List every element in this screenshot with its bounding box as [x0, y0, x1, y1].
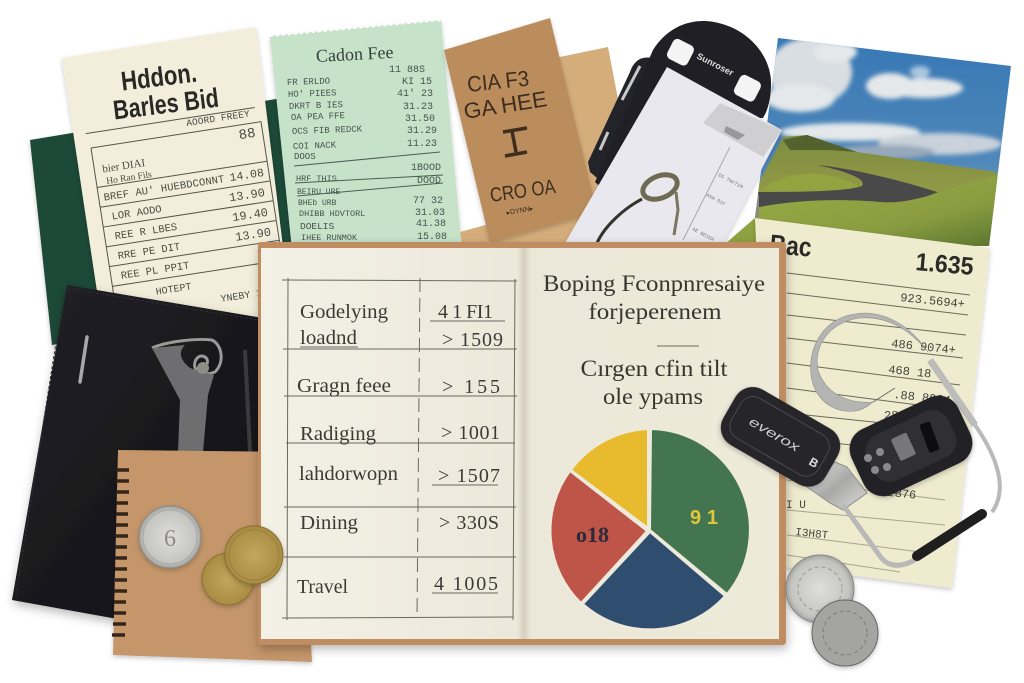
- strap connector: [807, 462, 867, 510]
- fee line items: COI NACK: [293, 140, 337, 152]
- foreground grass: [725, 175, 1000, 250]
- key fob left: B: [806, 454, 821, 471]
- winding road: [758, 165, 940, 208]
- handwritten notes: [462, 66, 558, 217]
- fee line items: BEIRU URE: [297, 188, 340, 197]
- expense table values: > 1509: [442, 329, 503, 351]
- ledger numbers: I U: [786, 500, 806, 512]
- silver coin upper: [786, 555, 854, 623]
- silver coin: [139, 506, 201, 568]
- fee line items: OA PEA FFE: [291, 111, 345, 123]
- fee line items: 41' 23: [397, 88, 433, 100]
- ledger numbers: I3H8T: [795, 527, 829, 542]
- fee line items: 1BOOD: [411, 163, 441, 174]
- wallet clasp: [152, 339, 221, 374]
- pie chart: 91: [690, 507, 718, 529]
- expense table labels: Gragn feee: [297, 375, 391, 397]
- receipt: cream bill: [62, 27, 292, 345]
- receipt table: RRE PE DIT: [117, 242, 181, 263]
- expense table labels: [297, 301, 398, 598]
- expense table labels: Travel: [297, 576, 348, 598]
- right ledger sheet: [755, 218, 990, 588]
- handwritten notes: ▸DYNN▸: [506, 205, 534, 217]
- black leather wallet: [12, 285, 275, 640]
- expense table values: > 330S: [439, 512, 499, 534]
- receipt table: Ho Ran Fils: [106, 170, 153, 187]
- fee line items: KI 15: [402, 77, 432, 88]
- metal ring: [811, 313, 928, 411]
- fee line items: DOOS: [294, 152, 316, 162]
- expense table labels: Godelying: [300, 301, 388, 323]
- right page heading: Cırgen cfin tilt: [580, 356, 728, 381]
- clipboard with paper: AE BDIDA: [691, 226, 715, 243]
- handwritten notes: GA HEE: [462, 86, 549, 124]
- fee line items: 31.23: [403, 102, 433, 113]
- clipboard with paper: [565, 21, 782, 243]
- ledger numbers: 923.5694+: [900, 291, 966, 312]
- green wallet behind receipts: [30, 98, 300, 345]
- fee line items: HRF THIS: [296, 174, 337, 184]
- gold coin small: [202, 553, 254, 605]
- expense table values: > 1001: [441, 422, 500, 444]
- left page: [261, 248, 525, 639]
- fee line items: FR ERLDO: [287, 76, 330, 88]
- car key set: [713, 313, 1000, 565]
- key fob left: everox: [746, 414, 803, 455]
- key fob right: [842, 388, 980, 504]
- receipt table: AOORD FREEY: [186, 108, 251, 129]
- receipt table: REE R LBES: [114, 222, 178, 243]
- fee line items: 15.08: [417, 232, 447, 243]
- ledger numbers: .2876: [880, 485, 917, 503]
- ledger numbers: [786, 291, 966, 542]
- fee line items: 77 32: [413, 196, 443, 207]
- fee line items: 11 88S: [389, 65, 425, 76]
- coins on notebook: [139, 506, 283, 605]
- fee line items: 31.50: [405, 114, 435, 125]
- folded tape: [703, 103, 782, 157]
- ledger numbers: 486 9074+: [891, 337, 957, 358]
- ledger numbers: 28: [884, 409, 898, 423]
- fee line items: 31.29: [407, 126, 437, 137]
- expense table values: > 1507: [438, 465, 500, 487]
- clipboard with paper: ASH DIF: [705, 192, 726, 208]
- lanyard hook: [597, 199, 642, 243]
- kraft card with handwriting: [444, 18, 597, 242]
- receipt table: bier DIAI: [102, 157, 146, 175]
- expense table labels: Dining: [300, 512, 358, 534]
- receipt title: Hddon.: [119, 58, 198, 97]
- expense table labels: loadnd: [300, 327, 357, 349]
- right page heading: ole ypams: [603, 384, 703, 409]
- right page: [525, 248, 779, 639]
- receipt table: 19.40: [231, 206, 269, 225]
- landscape photo: [727, 38, 1011, 246]
- ledger numbers: .88 8904: [893, 388, 951, 408]
- receipt table: [86, 107, 288, 322]
- expense table values: > 155: [442, 376, 500, 398]
- ledger rules: [787, 273, 970, 572]
- metal strap: [930, 360, 975, 425]
- fee line items: [287, 65, 447, 243]
- ledger heading: [768, 229, 975, 281]
- pie labels: o18: [576, 522, 609, 547]
- fee title: Cadon Fee: [315, 42, 394, 66]
- expense table labels: lahdorwopn: [299, 463, 398, 485]
- fee line items: 11.23: [407, 139, 437, 150]
- silver coin: 6: [164, 526, 176, 552]
- fee line items: DOOD: [417, 176, 441, 187]
- receipt table: 13.90: [234, 226, 272, 245]
- receipt table: HOTEPT: [155, 282, 192, 299]
- fee line items: DKRT B IES: [289, 100, 343, 112]
- black clip head: [595, 21, 771, 188]
- gold coin large: [225, 526, 283, 584]
- second clip arm: [588, 58, 660, 178]
- receipt table: REE PL PPIT: [120, 260, 190, 283]
- expense table labels: Radiging: [300, 423, 376, 445]
- paper sheet: [565, 67, 782, 243]
- clouds: [765, 38, 1002, 159]
- light kraft envelope: [460, 47, 622, 245]
- expense table grid: [282, 278, 517, 620]
- right page heading: Boping Fconpnresaiye: [543, 271, 765, 296]
- handwritten notes: CIA F3: [466, 66, 530, 97]
- clipboard with paper: Sunroser: [695, 51, 736, 78]
- fee line items: DOELIS: [300, 221, 335, 232]
- receipt: mint green fee: [270, 20, 462, 250]
- receipt table: 12.: [256, 245, 280, 262]
- silver coin lower: [812, 600, 878, 666]
- expense table values: [434, 301, 503, 595]
- fee line items: 41.38: [416, 219, 446, 230]
- receipt table: 17: [259, 265, 276, 281]
- receipt table: LOR AODO: [111, 204, 163, 224]
- receipt table: YNEBY 18: [220, 288, 269, 306]
- handwritten notes: CRO OA: [489, 176, 558, 207]
- receipt title: Barles Bid: [111, 83, 220, 125]
- fee line items: 31.03: [415, 208, 445, 219]
- clipboard with paper: DS TNFTIM: [717, 172, 744, 190]
- spiral binding: [112, 470, 129, 635]
- receipt table: 14.08: [229, 167, 265, 185]
- expense table values: 4 1 FI1: [438, 301, 493, 323]
- receipt title: [111, 58, 220, 125]
- expense table values: 4 1005: [434, 573, 498, 595]
- green hills: [725, 135, 1000, 250]
- ledger heading: Bac: [768, 229, 813, 263]
- spiral kraft notebook: [112, 450, 312, 662]
- right page heading: [543, 271, 765, 409]
- ledger heading: 1.635: [914, 248, 975, 281]
- key fob left: [713, 380, 848, 494]
- right page heading: forjeperenem: [588, 299, 722, 324]
- open notebook: [258, 242, 786, 645]
- receipt table: BREF AU' HUEBDCONNT: [103, 174, 225, 205]
- coins bottom right: [786, 555, 878, 666]
- fee line items: IHEE RUNMOK: [301, 233, 358, 243]
- book cover: [258, 242, 786, 645]
- black strap handle: [917, 514, 982, 556]
- ledger numbers: 468 18: [888, 363, 932, 381]
- fee line items: HO' PIEES: [288, 88, 337, 100]
- fee line items: OCS FIB REDCK: [292, 125, 363, 137]
- fee line items: BHEb URB: [298, 199, 337, 208]
- gray post: [755, 195, 759, 217]
- receipt table: 13.90: [228, 186, 266, 205]
- pie chart: [550, 429, 750, 629]
- receipt table: 88: [238, 126, 257, 144]
- fee line items: DHIBB HDVTORL: [299, 209, 365, 219]
